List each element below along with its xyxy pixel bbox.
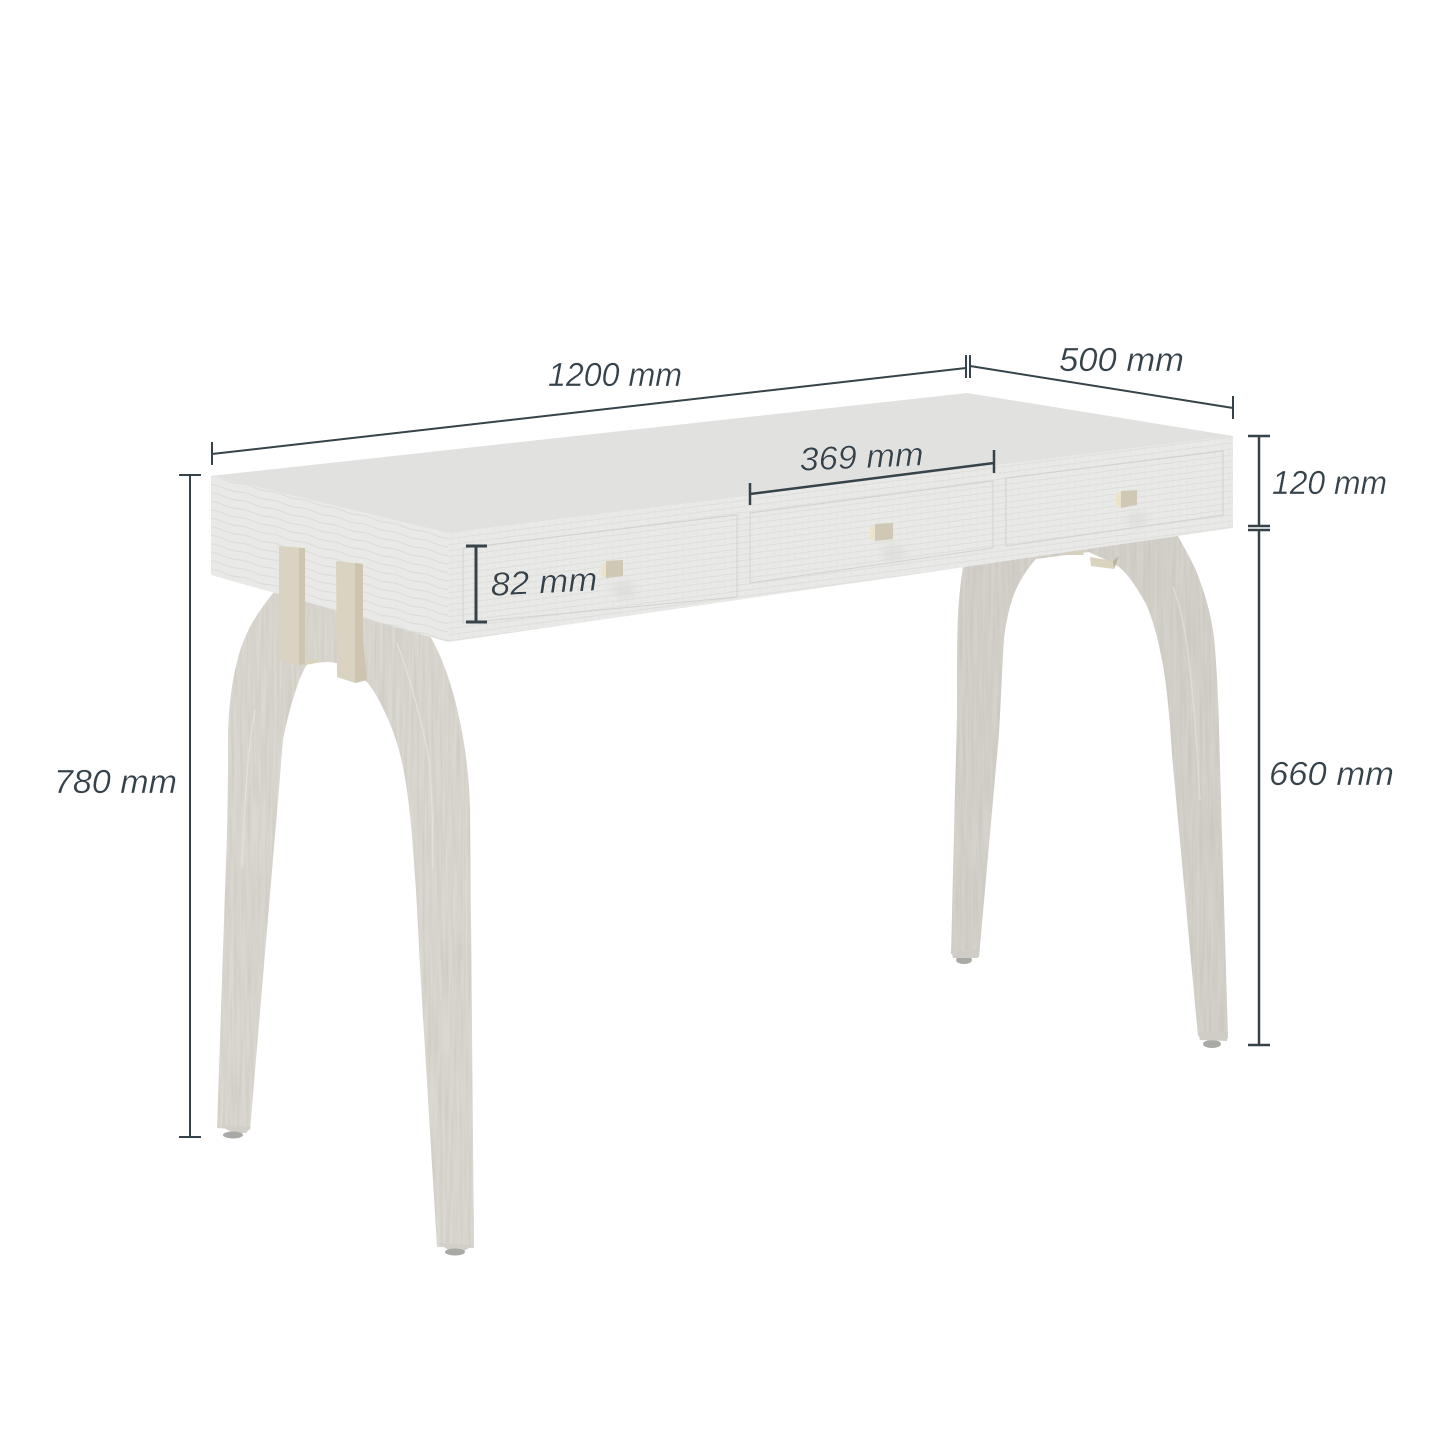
- right drawer: [1006, 451, 1223, 546]
- dimension: 1200 mm width: 1200 mm: [548, 356, 682, 393]
- dimension: 120 mm top height: [1248, 436, 1387, 526]
- second metal bracket: [336, 561, 367, 683]
- dimension: 369 mm drawer width: 369 mm: [799, 435, 924, 478]
- table front face: [448, 436, 1233, 642]
- back bracket: [1062, 550, 1119, 569]
- dimension: 82 mm drawer height: 82 mm: [490, 560, 598, 603]
- table illustration: [211, 393, 1233, 1256]
- table left side: [211, 476, 448, 642]
- front legs arch: [217, 592, 474, 1256]
- dimension: 500 mm depth: 500 mm: [1059, 341, 1184, 378]
- first metal bracket: [279, 546, 327, 666]
- right drawer handle: [1116, 490, 1147, 528]
- dimension: 82 mm drawer height: [466, 546, 598, 622]
- left drawer: [463, 515, 737, 623]
- dimension: 1200 mm width: [212, 355, 966, 465]
- dimension: 660 mm leg height: [1248, 530, 1394, 1045]
- dimension: 660 mm leg height: 660 mm: [1269, 755, 1394, 792]
- dimension: 369 mm drawer width: [750, 435, 994, 505]
- dimension: 780 mm total height: [54, 475, 201, 1137]
- dimension: 120 mm top height: 120 mm: [1272, 464, 1387, 501]
- back legs arch: [951, 530, 1228, 1048]
- table top surface: [211, 393, 1233, 533]
- center drawer handle: [870, 523, 904, 562]
- dimension: 780 mm total height: 780 mm: [54, 763, 177, 800]
- dimension: 500 mm depth: [970, 341, 1233, 419]
- center drawer: [750, 481, 993, 583]
- left drawer handle: [601, 560, 635, 599]
